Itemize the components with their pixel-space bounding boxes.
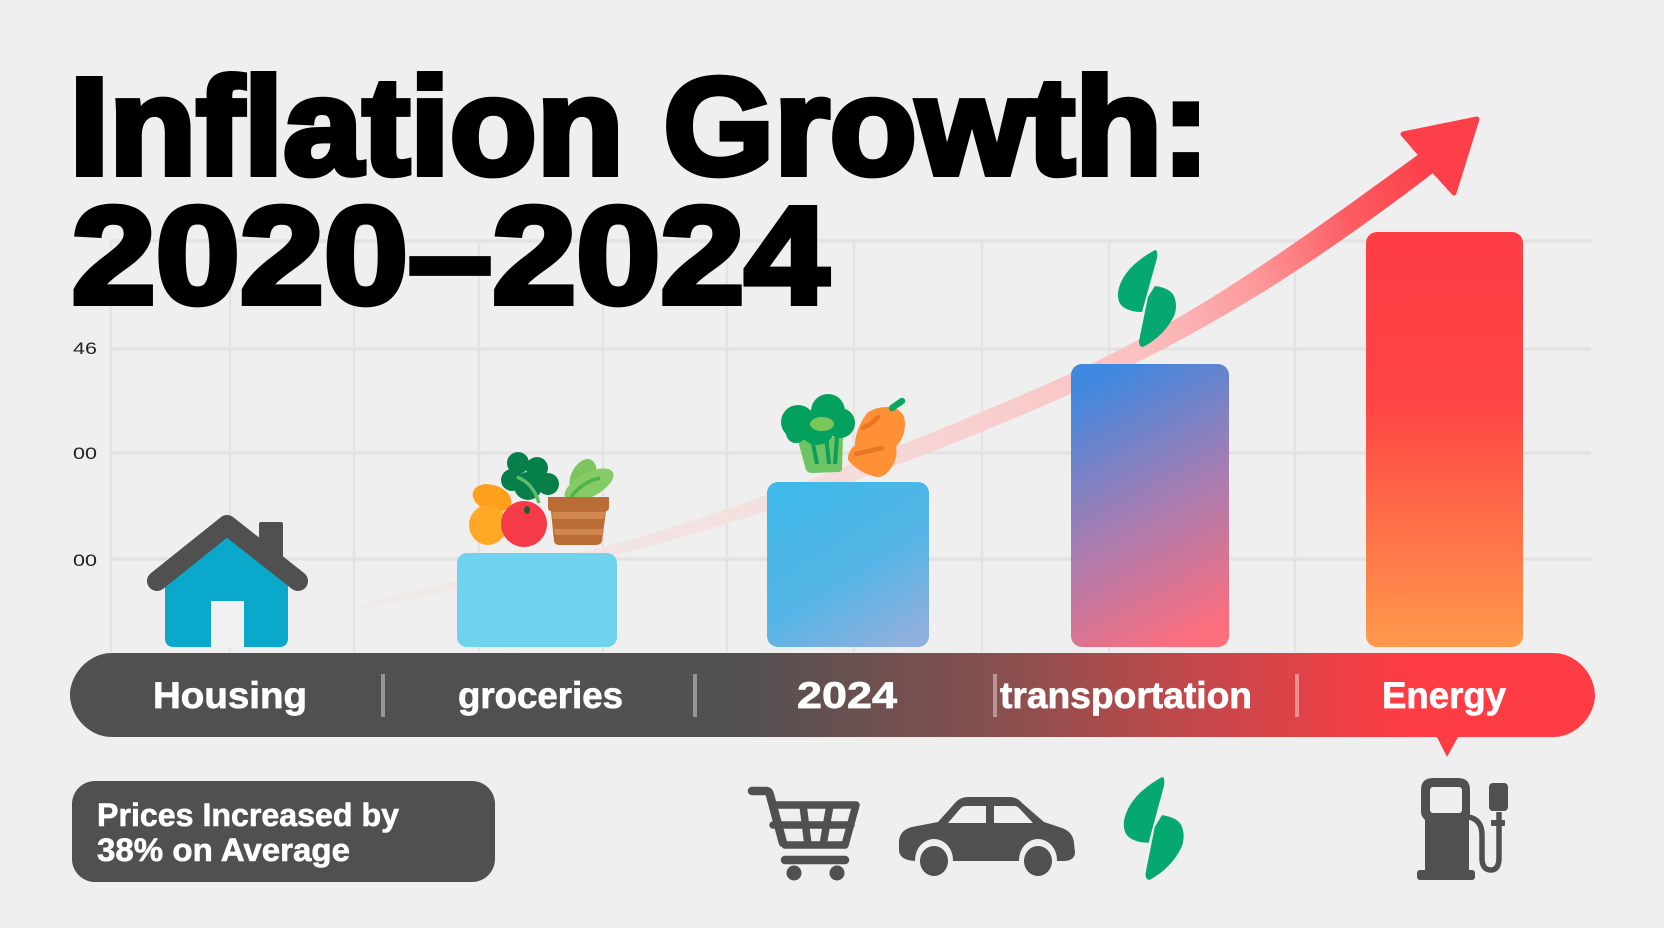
rising arrow	[359, 119, 1477, 610]
label: transportation: transportation	[1000, 675, 1252, 716]
category band	[70, 653, 1595, 757]
callout: average price increase	[72, 781, 495, 882]
bar: housing (house icon)	[157, 522, 298, 648]
bar: transportation	[1071, 364, 1229, 647]
icon: broccoli and carrot	[781, 394, 905, 477]
icon: fruit, herbs and potted greens	[469, 452, 618, 547]
y-axis labels	[73, 339, 97, 570]
label: groceries: groceries	[458, 675, 623, 716]
y-axis labels: 46	[73, 339, 97, 358]
icon: green leaf above bar	[1118, 250, 1176, 347]
icon: fuel pump	[1417, 778, 1508, 880]
chart grid	[111, 241, 1591, 652]
title: 2020–2024	[72, 179, 829, 333]
bar: groceries	[457, 553, 617, 647]
title	[70, 50, 1210, 333]
label: energy: Energy	[1382, 675, 1506, 716]
bar: 2024	[767, 482, 929, 647]
icon: shopping cart	[752, 791, 856, 880]
bar: energy	[1366, 232, 1523, 647]
callout: average price increase: Prices Increased by	[97, 797, 399, 833]
label: 2024: 2024	[797, 675, 898, 716]
title: Inflation Growth:	[70, 50, 1210, 204]
icon: car	[899, 797, 1075, 881]
y-axis labels: 00	[73, 444, 97, 463]
label: housing: Housing	[153, 675, 307, 716]
y-axis labels: 00	[73, 551, 97, 570]
icon: green leaf below band	[1124, 777, 1184, 880]
callout: average price increase: 38% on Average	[97, 832, 350, 868]
